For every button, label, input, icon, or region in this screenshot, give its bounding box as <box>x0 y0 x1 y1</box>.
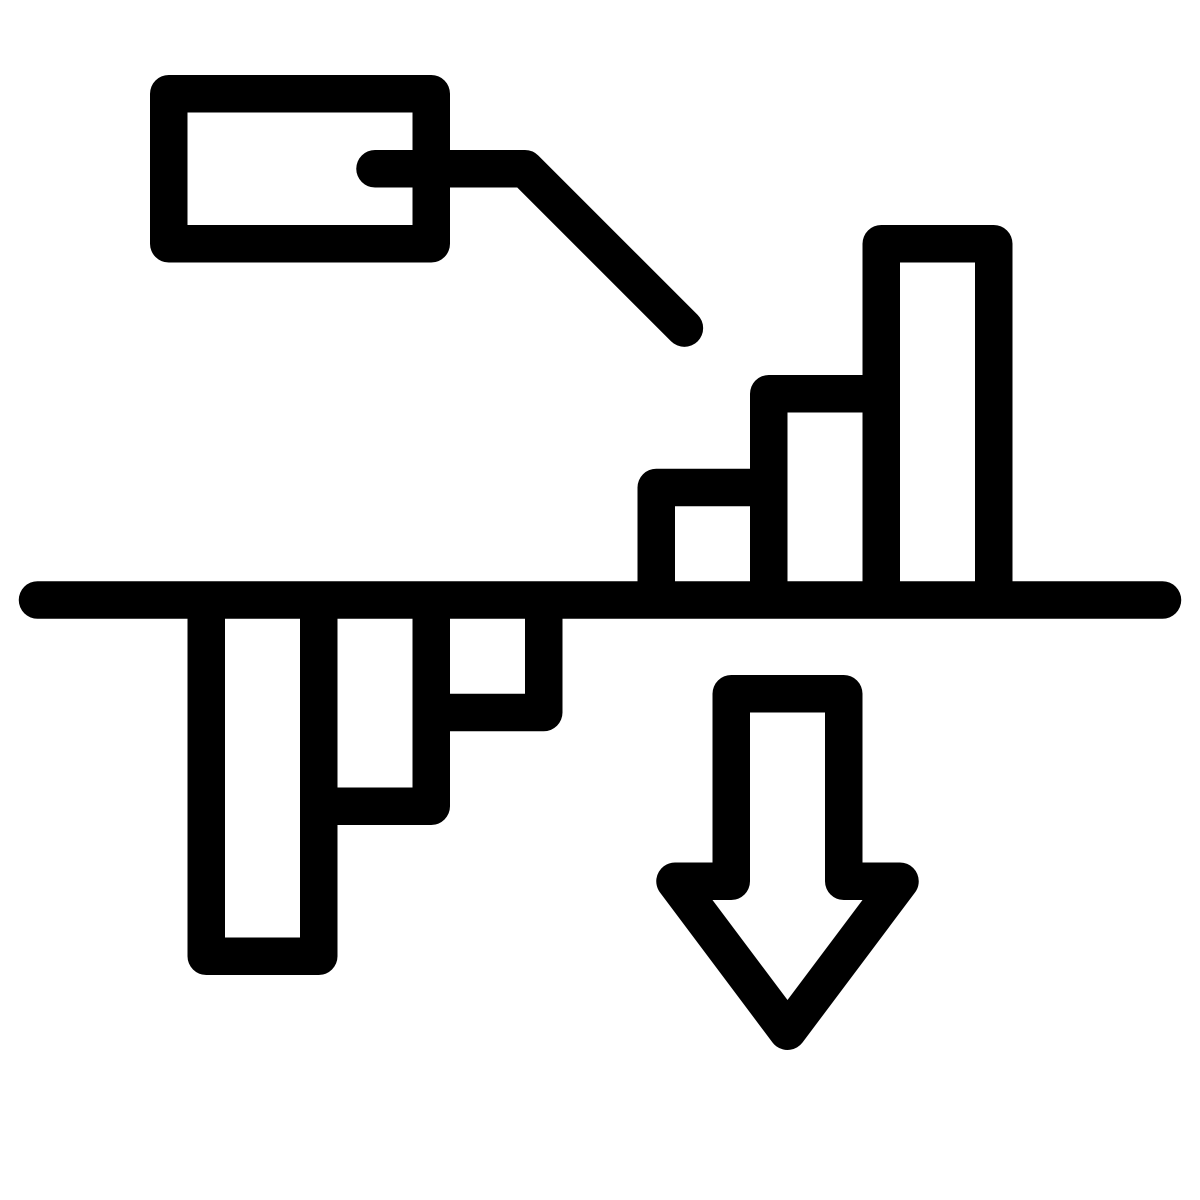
baseline axis <box>38 581 1162 619</box>
negative bar medium <box>325 610 431 806</box>
negative bar small <box>437 610 544 712</box>
negative bar tall <box>206 610 319 956</box>
down arrow <box>675 694 900 1031</box>
positive bar small <box>656 488 769 590</box>
positive bar tall <box>881 244 994 590</box>
label box <box>169 94 431 244</box>
leader line <box>375 169 684 328</box>
positive bar medium <box>769 394 881 590</box>
